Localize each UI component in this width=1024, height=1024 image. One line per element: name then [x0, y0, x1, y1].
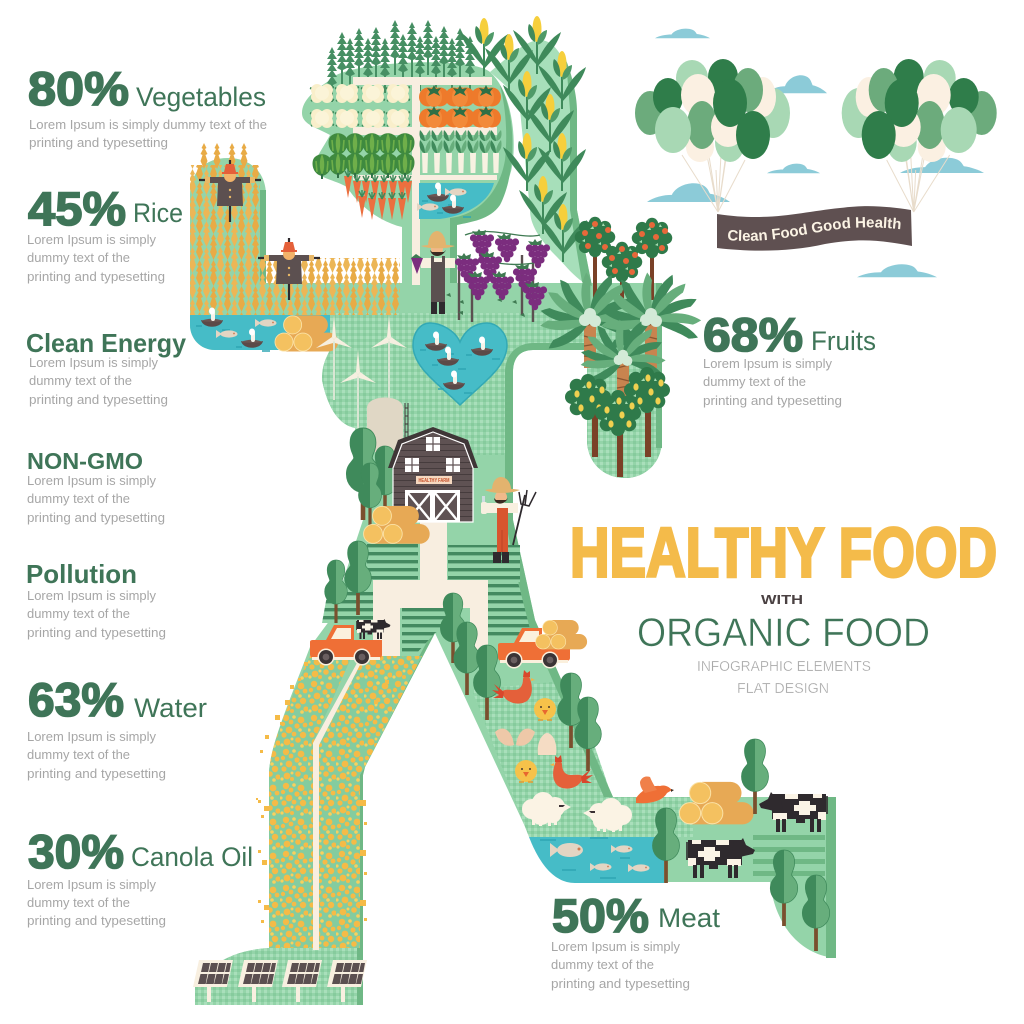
head: tomatoes [419, 85, 501, 128]
stat: Clean Energy: Clean Energy [26, 328, 187, 358]
stat: 50% Meat: dummy text of the [551, 957, 654, 972]
hay bales at pond [275, 315, 338, 352]
stat: Clean Energy [26, 328, 187, 407]
bird [636, 777, 674, 803]
title block: ORGANIC FOOD [637, 611, 930, 655]
stat: Clean Energy: dummy text of the [29, 373, 132, 388]
head: lettuces [313, 133, 414, 179]
stat: Pollution: Pollution [26, 559, 137, 589]
stat: 30% Canola Oil: Canola Oil [131, 842, 253, 872]
wind turbines [316, 314, 407, 435]
clouds [647, 29, 984, 277]
darker edge strips [260, 60, 836, 1005]
barn sign: HEALTHY FARM [418, 478, 450, 484]
banner: Clean Food Good Health [717, 206, 912, 251]
silo [367, 398, 408, 452]
stat: 80% Vegetables: printing and typesetting [29, 135, 168, 150]
stat: 30% Canola Oil: 30% [28, 825, 124, 878]
stat: Pollution: Lorem Ipsum is simply [27, 588, 156, 603]
head: pond [417, 182, 494, 219]
wheat field on the arm [190, 143, 400, 315]
leg trees [474, 645, 601, 771]
tall poplar trees by barn [346, 428, 398, 527]
stat: 63% Water: printing and typesetting [27, 766, 166, 781]
stat: 45% Rice: dummy text of the [27, 250, 130, 265]
stat: 68% Fruits [703, 308, 876, 408]
corn plants [460, 16, 587, 262]
banner: Clean Food Good Health: Clean Food Good Health [728, 217, 900, 241]
stat: 63% Water: dummy text of the [27, 747, 130, 762]
grid textures [195, 313, 693, 1005]
stat: 68% Fruits: 68% [703, 308, 803, 361]
stat: 45% Rice: printing and typesetting [27, 269, 165, 284]
road-side poplar trees [325, 541, 480, 695]
stat: 63% Water [27, 673, 207, 781]
stat: 30% Canola Oil: dummy text of the [27, 895, 130, 910]
body silhouette [190, 158, 836, 1005]
foot trees [652, 739, 830, 951]
farmer with pitchfork [481, 477, 536, 563]
pond on the arm [190, 308, 330, 351]
chickens and chicks [492, 670, 593, 789]
scarecrows [199, 160, 320, 300]
stat: Clean Energy: printing and typesetting [29, 392, 168, 407]
stat: 30% Canola Oil: Lorem Ipsum is simply [27, 877, 156, 892]
title block: FLAT DESIGN [737, 680, 829, 697]
stat: Pollution: dummy text of the [27, 606, 130, 621]
stat: 80% Vegetables: 80% [28, 62, 129, 115]
hay bales near cows [679, 782, 754, 824]
fruit trees: oranges [575, 217, 672, 300]
stat: 63% Water: Lorem Ipsum is simply [27, 729, 156, 744]
title block: INFOGRAPHIC ELEMENTS [697, 658, 871, 675]
stat: 45% Rice [27, 182, 183, 284]
foot stripes [753, 835, 825, 876]
head: carrots [344, 170, 412, 220]
head: cauliflowers [310, 84, 410, 128]
title block [570, 514, 997, 697]
head: white radishes [419, 130, 502, 173]
stat: 63% Water: 63% [28, 673, 124, 726]
stat: NON-GMO: NON-GMO [27, 448, 143, 474]
canola fields on leg [256, 656, 422, 950]
barn [388, 427, 478, 522]
stat: Pollution [26, 559, 166, 640]
sheep [522, 792, 632, 832]
balloons left bunch [635, 59, 790, 212]
grape vines [446, 229, 550, 322]
stat: 68% Fruits: Lorem Ipsum is simply [703, 356, 832, 371]
stat: Clean Energy: Lorem Ipsum is simply [29, 355, 158, 370]
stat: 80% Vegetables: Lorem Ipsum is simply dummy text of the [29, 117, 267, 132]
farm road [373, 522, 488, 662]
figure: running person silhouette [190, 40, 836, 1005]
fish pond on foot [529, 837, 664, 883]
heart pond [413, 323, 507, 405]
hay bales by barn [364, 506, 430, 544]
cows [687, 792, 827, 878]
stat: 80% Vegetables [28, 62, 267, 150]
stat: 68% Fruits: printing and typesetting [703, 393, 842, 408]
stat: 50% Meat [551, 889, 721, 991]
head silhouette [302, 62, 514, 290]
stat: 30% Canola Oil [27, 825, 253, 928]
stat: NON-GMO: Lorem Ipsum is simply [27, 473, 156, 488]
hair panel [490, 40, 592, 286]
head: cream paths [353, 77, 497, 285]
truck with cow [310, 619, 390, 666]
stat: 80% Vegetables: Vegetables [136, 82, 266, 112]
truck with hay [498, 620, 587, 668]
stat: Pollution: printing and typesetting [27, 625, 166, 640]
title block: WITH [761, 592, 803, 607]
stat: 30% Canola Oil: printing and typesetting [27, 913, 166, 928]
stat: 50% Meat: Lorem Ipsum is simply [551, 939, 680, 954]
farmer with grapes [411, 231, 455, 314]
balloons right bunch [842, 59, 997, 212]
stat: 68% Fruits: dummy text of the [703, 374, 806, 389]
crop rows [322, 543, 532, 665]
stat: 68% Fruits: Fruits [811, 326, 876, 356]
palm trees [539, 272, 702, 410]
fruit trees: lemons [565, 367, 670, 477]
stat: 50% Meat: Meat [658, 903, 721, 933]
stat: NON-GMO: dummy text of the [27, 491, 130, 506]
stat: 45% Rice: Rice [133, 198, 183, 228]
stat: 45% Rice: Lorem Ipsum is simply [27, 232, 156, 247]
head: sprout crop at top [327, 20, 475, 102]
stat: 45% Rice: 45% [28, 182, 126, 235]
solar panels [193, 960, 367, 1002]
stat: 63% Water: Water [134, 693, 207, 723]
stat: 50% Meat: printing and typesetting [551, 976, 690, 991]
stat: 50% Meat: 50% [552, 889, 649, 942]
stat: NON-GMO [27, 448, 165, 525]
stat: NON-GMO: printing and typesetting [27, 510, 165, 525]
